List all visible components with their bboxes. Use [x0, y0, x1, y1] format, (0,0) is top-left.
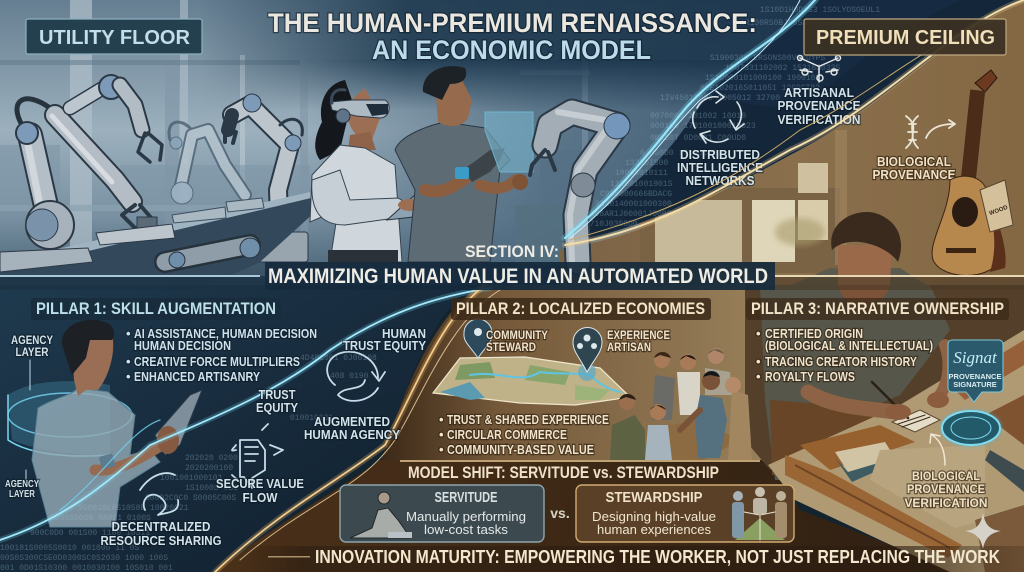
label: decentralized resource sharing: DECENTRALIZED: [112, 519, 210, 534]
label: biological provenance verification: [904, 469, 988, 510]
label: secure value flow: FLOW: [242, 490, 278, 505]
badge: utility floor: [26, 19, 202, 54]
binary texture: pillar 1: 900C0D0 001S00 1100 10S11: [30, 529, 150, 538]
binary texture: pillar 1: 4D401001 0J00108: [300, 354, 377, 363]
section heading: MAXIMIZING HUMAN VALUE IN AN AUTOMATED WORLD: [268, 265, 768, 288]
binary texture: pillar 1: 010010001: [290, 414, 333, 423]
pillar 1 bullets: •: [126, 326, 131, 341]
binary texture: pillar 1: 9S0010L0S1058E 10020021: [78, 504, 189, 513]
background: title dark wash: [219, 0, 820, 106]
background: digital diagonal with binary code: 0070003 201002 10010: [650, 112, 746, 121]
label: secure value flow: [216, 476, 304, 505]
label: trust equity: TRUST: [258, 387, 296, 402]
pillar 2 bullets: CIRCULAR COMMERCE: [447, 427, 567, 442]
label: trust equity: [256, 387, 298, 415]
model shift heading: MODEL SHIFT: SERVITUDE vs. STEWARDSHIP: [408, 464, 719, 482]
robot arm: centre foreground: [225, 94, 308, 262]
person: man with haptic glove: [395, 66, 528, 262]
background: digital diagonal with binary code: 1S10000101000100 1900103: [705, 74, 820, 83]
label: distributed intelligence networks: NETWORKS: [686, 173, 755, 188]
card: stewardship: STEWARDSHIP: [606, 489, 702, 506]
label: biological provenance verification: BIOLOGICAL: [912, 469, 980, 483]
pin: experience artisan: [573, 328, 602, 372]
pillar 1 bullets: •: [126, 354, 131, 369]
robot arm: left large: [16, 75, 162, 249]
pillar 3 bullets: [756, 326, 933, 384]
map with routes: [433, 357, 630, 405]
pillar 3 bullets: TRACING CREATOR HISTORY: [765, 354, 917, 369]
vs label: vs.: [550, 505, 570, 521]
section band: [0, 262, 1024, 290]
background: digital diagonal with binary code: S1900309 ERSONS00VG1UYPS: [710, 54, 825, 63]
label: agency layer bottom: [5, 478, 39, 500]
title: AN ECONOMIC MODEL: [372, 35, 651, 65]
label: human trust equity: TRUST EQUITY: [343, 338, 426, 353]
pillar 2 bullets: •: [439, 442, 444, 457]
background: utility floor factory: [0, 0, 820, 290]
binary texture: pillar 1: 00S0S300CSE0D0300SC0S2030 1000 100S: [0, 554, 168, 563]
label: agency layer bottom: LAYER: [9, 488, 35, 500]
holographic screen: [485, 112, 533, 172]
energy streak: gold: [215, 0, 1024, 572]
pillar 3 bullets: ROYALTY FLOWS: [765, 369, 855, 384]
label: biological provenance: BIOLOGICAL: [877, 154, 951, 169]
energy streak: blue: [0, 0, 815, 540]
background: digital diagonal with binary code: 0330140001000300: [595, 200, 672, 209]
pillar 2 heading: PILLAR 2: LOCALIZED ECONOMIES: [456, 299, 705, 318]
pillar 1 bullets: AI ASSISTANCE, HUMAN DECISION: [134, 326, 317, 341]
icon: artisanal provenance network: [798, 56, 840, 82]
background: lower brown band: [215, 460, 960, 572]
label: agency layer bottom: AGENCY: [5, 478, 39, 490]
label: experience artisan: EXPERIENCE: [607, 328, 670, 342]
provenance signature tag: SIGNATURE: [953, 380, 997, 389]
guitar with provenance tag: WOOD: [989, 205, 1009, 217]
label: distributed intelligence networks: DISTRIBUTED: [680, 147, 760, 162]
background: pillar 3 wall and body: [745, 285, 1024, 480]
card: stewardship: human experiences: [597, 522, 711, 537]
provenance signature tag: Signat: [953, 348, 998, 367]
icon: DNA with arrow: [906, 116, 955, 148]
background: digital diagonal with binary code: [570, 0, 1024, 245]
label: secure value flow: SECURE VALUE: [216, 476, 304, 491]
card: servitude: Manually performing: [406, 509, 526, 524]
provenance seal: [939, 408, 1003, 448]
section heading: [268, 243, 768, 288]
card: stewardship: [576, 485, 794, 542]
background: digital diagonal with binary code: 1IV45012006 1005012 32700: [660, 94, 780, 103]
pillar 2 bullets: TRUST & SHARED EXPERIENCE: [447, 412, 609, 427]
title: [268, 8, 757, 65]
binary texture: pillar 1: 1S1000S 0S1: [185, 484, 238, 493]
label: community steward: STEWARD: [486, 340, 536, 354]
label: community steward: COMMUNITY: [486, 328, 548, 342]
background: digital diagonal with binary code: 0BVS0T 0D0001 C00UD0: [650, 134, 746, 143]
label: agency layer top: [11, 333, 53, 359]
pin: community steward: [464, 319, 492, 358]
badge: premium ceiling: PREMIUM CEILING: [816, 26, 995, 49]
pillar 1 bullets: •: [126, 369, 131, 384]
label: agency layer top: AGENCY: [11, 333, 53, 347]
pillar 1 bullets: [126, 326, 317, 384]
label: artisanal provenance verification: ARTISANAL: [784, 85, 854, 100]
title: THE HUMAN-PREMIUM RENAISSANCE:: [268, 8, 757, 38]
background: pillar 2 warm panel: [380, 285, 780, 465]
label: agency layer top: LAYER: [16, 345, 49, 359]
background: digital diagonal with binary code: 133B0IS00: [625, 159, 668, 168]
binary texture: pillar 1: [0, 354, 377, 572]
background: digital diagonal with binary code: 000100 170100100018023: [650, 122, 756, 131]
pillar 1 bullets: HUMAN DECISION: [134, 338, 231, 353]
guitar with provenance tag: [932, 70, 1013, 276]
background: digital diagonal with binary code: 1S10D1H0D0S3 1SOLYOSOEUL1: [760, 6, 880, 15]
pillar 1 hologram rings: [8, 360, 132, 480]
label: artisanal provenance verification: [778, 85, 861, 127]
background: premium ceiling wall: [560, 0, 1024, 290]
robot arm: centre background: [169, 122, 245, 204]
label: artisanal provenance verification: VERIFICATION: [778, 112, 860, 127]
label: augmented human agency: HUMAN AGENCY: [304, 427, 400, 442]
binary texture: pillar 1: 1001001000101: [160, 474, 223, 483]
label: augmented human agency: AUGMENTED: [314, 414, 390, 429]
binary texture: pillar 1: 408 0190: [330, 372, 369, 381]
pillar 3 bullets: •: [756, 326, 761, 341]
label: distributed intelligence networks: [677, 147, 763, 188]
binary texture: pillar 1: 100181S0005S0010 001000 11 0S: [0, 544, 139, 553]
label: augmented human agency: [304, 414, 400, 442]
background: digital diagonal with binary code: 112001001901S: [610, 180, 673, 189]
pillar 2 bullets: •: [439, 412, 444, 427]
background: digital diagonal with binary code: 1007331102002 15216S033S: [725, 64, 840, 73]
person: craftsman upper: [780, 212, 950, 300]
arrow: to seal: [930, 434, 945, 465]
background: digital diagonal with binary code: 1000S010111: [615, 169, 668, 178]
community group around table: [610, 348, 752, 462]
icon: distributed network cycle: [693, 91, 744, 143]
provenance signature tag: [948, 340, 1003, 402]
binary texture: pillar 1: 202020 0200: [185, 454, 238, 463]
label: biological provenance: PROVENANCE: [872, 167, 956, 182]
pillar 3 bullets: (BIOLOGICAL & INTELLECTUAL): [765, 338, 933, 353]
pillar 1 bullets: ENHANCED ARTISANRY: [134, 369, 260, 384]
binary texture: pillar 1: 2020200100: [185, 464, 233, 473]
label: artisanal provenance verification: PROVENANCE: [778, 98, 861, 113]
background: digital diagonal with binary code: 0408AR1J00001J00B0: [585, 210, 672, 219]
icons: pillar 1 cycles: [140, 352, 385, 515]
card: stewardship: Designing high-value: [592, 509, 716, 524]
person: pillar 1 man with tablet: [32, 320, 202, 527]
label: distributed intelligence networks: INTELLIGENCE: [677, 160, 763, 175]
footer statement: [240, 546, 1024, 572]
conveyor belt with trays: [0, 192, 315, 290]
label: community steward: [486, 328, 548, 354]
background: pillar 1 navy panel: [0, 285, 480, 572]
background: digital diagonal with binary code: C006000666BDACG: [600, 190, 672, 199]
person: woman in VR headset: [310, 80, 448, 264]
label: decentralized resource sharing: RESOURCE SHARING: [100, 533, 222, 548]
label: experience artisan: [607, 328, 670, 354]
sparkle mark: [965, 513, 1001, 549]
pillar 3 bullets: •: [756, 369, 761, 384]
background: digital diagonal with binary code: 1R100RS0BJD6S3ORQDE0DPPBJ1: [740, 19, 865, 28]
pillar 2 bullets: COMMUNITY-BASED VALUE: [447, 442, 594, 457]
label: decentralized resource sharing: [100, 519, 222, 548]
section heading: SECTION IV:: [465, 243, 559, 261]
label: human trust equity: HUMAN: [382, 326, 426, 341]
pillar 3 bullets: CERTIFIED ORIGIN: [765, 326, 863, 341]
binary texture: pillar 1: S0002C0C0 S0005C00S: [145, 494, 236, 503]
card: servitude: [340, 485, 544, 542]
background: digital diagonal with binary code: 0 0S0D0 171001001: [640, 149, 722, 158]
rug on the workbench: [768, 330, 1024, 572]
label: human trust equity: [343, 326, 426, 353]
pillar 1 heading: PILLAR 1: SKILL AUGMENTATION: [36, 299, 276, 318]
label: biological provenance verification: PROVENANCE: [907, 482, 985, 496]
pillar 2 bullets: •: [439, 427, 444, 442]
label: biological provenance verification: VERIFICATION: [904, 496, 988, 510]
provenance signature tag: PROVENANCE: [949, 372, 1001, 381]
card: servitude: SERVITUDE: [434, 489, 498, 506]
background: digital diagonal with binary code: 10710J0300D0: [580, 220, 638, 229]
robot arm: right: [530, 112, 630, 262]
pillar 3 bullets: •: [756, 354, 761, 369]
label: experience artisan: ARTISAN: [607, 340, 651, 354]
pillar 2 bullets: [439, 412, 609, 457]
label: trust equity: EQUITY: [256, 400, 298, 415]
badge: premium ceiling: [804, 19, 1006, 55]
binary texture: pillar 1: 00S0S5000 0A061 0100S: [50, 514, 151, 523]
badge: utility floor: UTILITY FLOOR: [39, 26, 190, 49]
pillar 1 bullets: CREATIVE FORCE MULTIPLIERS: [134, 354, 300, 369]
card: servitude: low-cost tasks: [424, 522, 509, 537]
background: digital diagonal with binary code: 0CE102016S011051 106GCT82: [700, 84, 820, 93]
label: biological provenance: [872, 154, 956, 182]
